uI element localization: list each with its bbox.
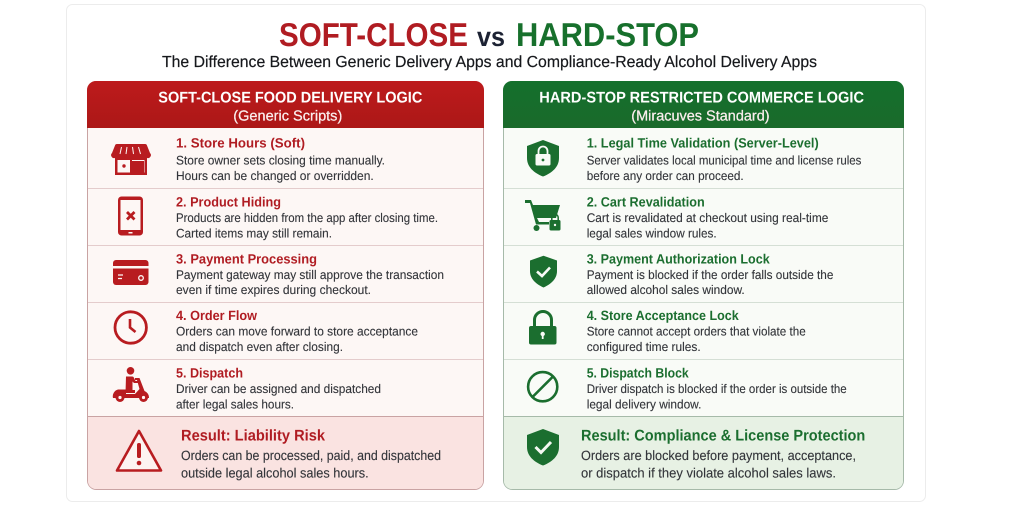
row: cart revalidation: legal sales window rules.: [587, 226, 717, 240]
panel background left: [88, 82, 484, 490]
row: dispatch block: 5. Dispatch Block: [587, 365, 689, 380]
title: [279, 16, 699, 53]
row: legal time validation: before any order can proceed.: [587, 169, 744, 183]
header: hard-stop: [503, 81, 904, 128]
row: dispatch: Driver can be assigned and dispatched: [176, 382, 381, 396]
row: payment authorization lock: 3. Payment Authorization Lock: [587, 251, 770, 266]
row: store acceptance lock: Store cannot accept orders that violate the: [587, 325, 806, 339]
icon: result shield: [527, 429, 559, 466]
row: cart revalidation: [525, 194, 828, 240]
header: soft-close: (Generic Scripts): [233, 108, 342, 124]
row: order flow: and dispatch even after closing.: [176, 340, 343, 354]
row: dispatch block: [528, 365, 847, 411]
icon: shield lock: [527, 140, 559, 176]
row: dispatch: [113, 365, 381, 411]
row: store hours: 1. Store Hours (Soft): [176, 136, 305, 151]
result: liability risk: outside legal alcohol sales hours.: [181, 466, 369, 481]
result: compliance and license protection: Result: Compliance & License Protection: [581, 428, 865, 445]
row: cart revalidation: 2. Cart Revalidation: [587, 194, 705, 209]
result: compliance and license protection: [527, 428, 865, 481]
row: payment processing: 3. Payment Processing: [176, 251, 317, 266]
icon: prohibition sign: [528, 372, 557, 401]
header: hard-stop: (Miracuves Standard): [631, 108, 770, 124]
row: store acceptance lock: 4. Store Acceptance Lock: [587, 308, 739, 323]
result: liability risk: Orders can be processed, paid, and dispatched: [181, 448, 441, 463]
title: HARD-STOP: [516, 16, 699, 53]
row: store hours: Hours can be changed or overridden.: [176, 169, 374, 183]
row: legal time validation: Server validates local municipal time and license rules: [587, 153, 861, 167]
row: store hours: [111, 136, 385, 183]
result: liability risk: [117, 428, 441, 481]
row: product hiding: Carted items may still remain.: [176, 226, 332, 240]
result: compliance and license protection: or dispatch if they violate alcohol sales laws.: [581, 466, 836, 481]
row: legal time validation: [527, 136, 861, 183]
row: dispatch: after legal sales hours.: [176, 397, 294, 411]
icon: padlock: [529, 312, 556, 344]
panel: soft-close: [87, 81, 484, 490]
row: order flow: 4. Order Flow: [176, 308, 257, 323]
row: payment authorization lock: [530, 251, 833, 297]
title: vs: [477, 22, 505, 52]
row: cart revalidation: Cart is revalidated at checkout using real-time: [587, 211, 828, 225]
row: legal time validation: 1. Legal Time Validation (Server-Level): [587, 136, 819, 151]
result band right: [504, 417, 903, 489]
row: dispatch block: Driver dispatch is blocked if the order is outside the: [587, 382, 847, 396]
result: liability risk: Result: Liability Risk: [181, 428, 325, 445]
row: payment authorization lock: allowed alcohol sales window.: [587, 283, 745, 297]
icon: clock: [115, 312, 146, 343]
row: store hours: Store owner sets closing time manually.: [176, 153, 385, 167]
icon: scooter rider: [113, 367, 149, 402]
row: order flow: [115, 308, 418, 354]
header: hard-stop: HARD-STOP RESTRICTED COMMERCE LOGIC: [539, 89, 864, 106]
subtitle: The Difference Between Generic Delivery Apps and Compliance-Ready Alcohol Delivery Apps: [162, 54, 817, 71]
row: dispatch: 5. Dispatch: [176, 365, 243, 380]
row: dispatch block: legal delivery window.: [587, 397, 701, 411]
header: soft-close: [87, 81, 484, 128]
row: payment processing: Payment gateway may still approve the transaction: [176, 268, 444, 282]
row: product hiding: [118, 194, 438, 240]
icon: cart with lock: [525, 200, 560, 231]
icon: warning triangle: [117, 431, 161, 470]
result band left: [88, 417, 483, 489]
header: soft-close: SOFT-CLOSE FOOD DELIVERY LOGIC: [158, 89, 422, 106]
icon: phone with x: [118, 196, 143, 236]
row: product hiding: Products are hidden from the app after closing time.: [176, 211, 438, 225]
row: product hiding: 2. Product Hiding: [176, 194, 281, 209]
panel: hard-stop: [503, 81, 904, 490]
result: compliance and license protection: Orders are blocked before payment, acceptance,: [581, 448, 856, 463]
row: payment processing: even if time expires during checkout.: [176, 283, 371, 297]
row: payment processing: [113, 251, 444, 297]
row: store acceptance lock: configured time rules.: [587, 340, 701, 354]
row: payment authorization lock: Payment is blocked if the order falls outside the: [587, 268, 833, 282]
icon: shield check: [530, 256, 557, 288]
icon: credit card: [113, 260, 148, 285]
panel background right: [504, 82, 904, 490]
row: order flow: Orders can move forward to store acceptance: [176, 325, 418, 339]
icon: store: [111, 144, 151, 175]
title: SOFT-CLOSE: [279, 16, 468, 53]
row: store acceptance lock: [529, 308, 806, 354]
